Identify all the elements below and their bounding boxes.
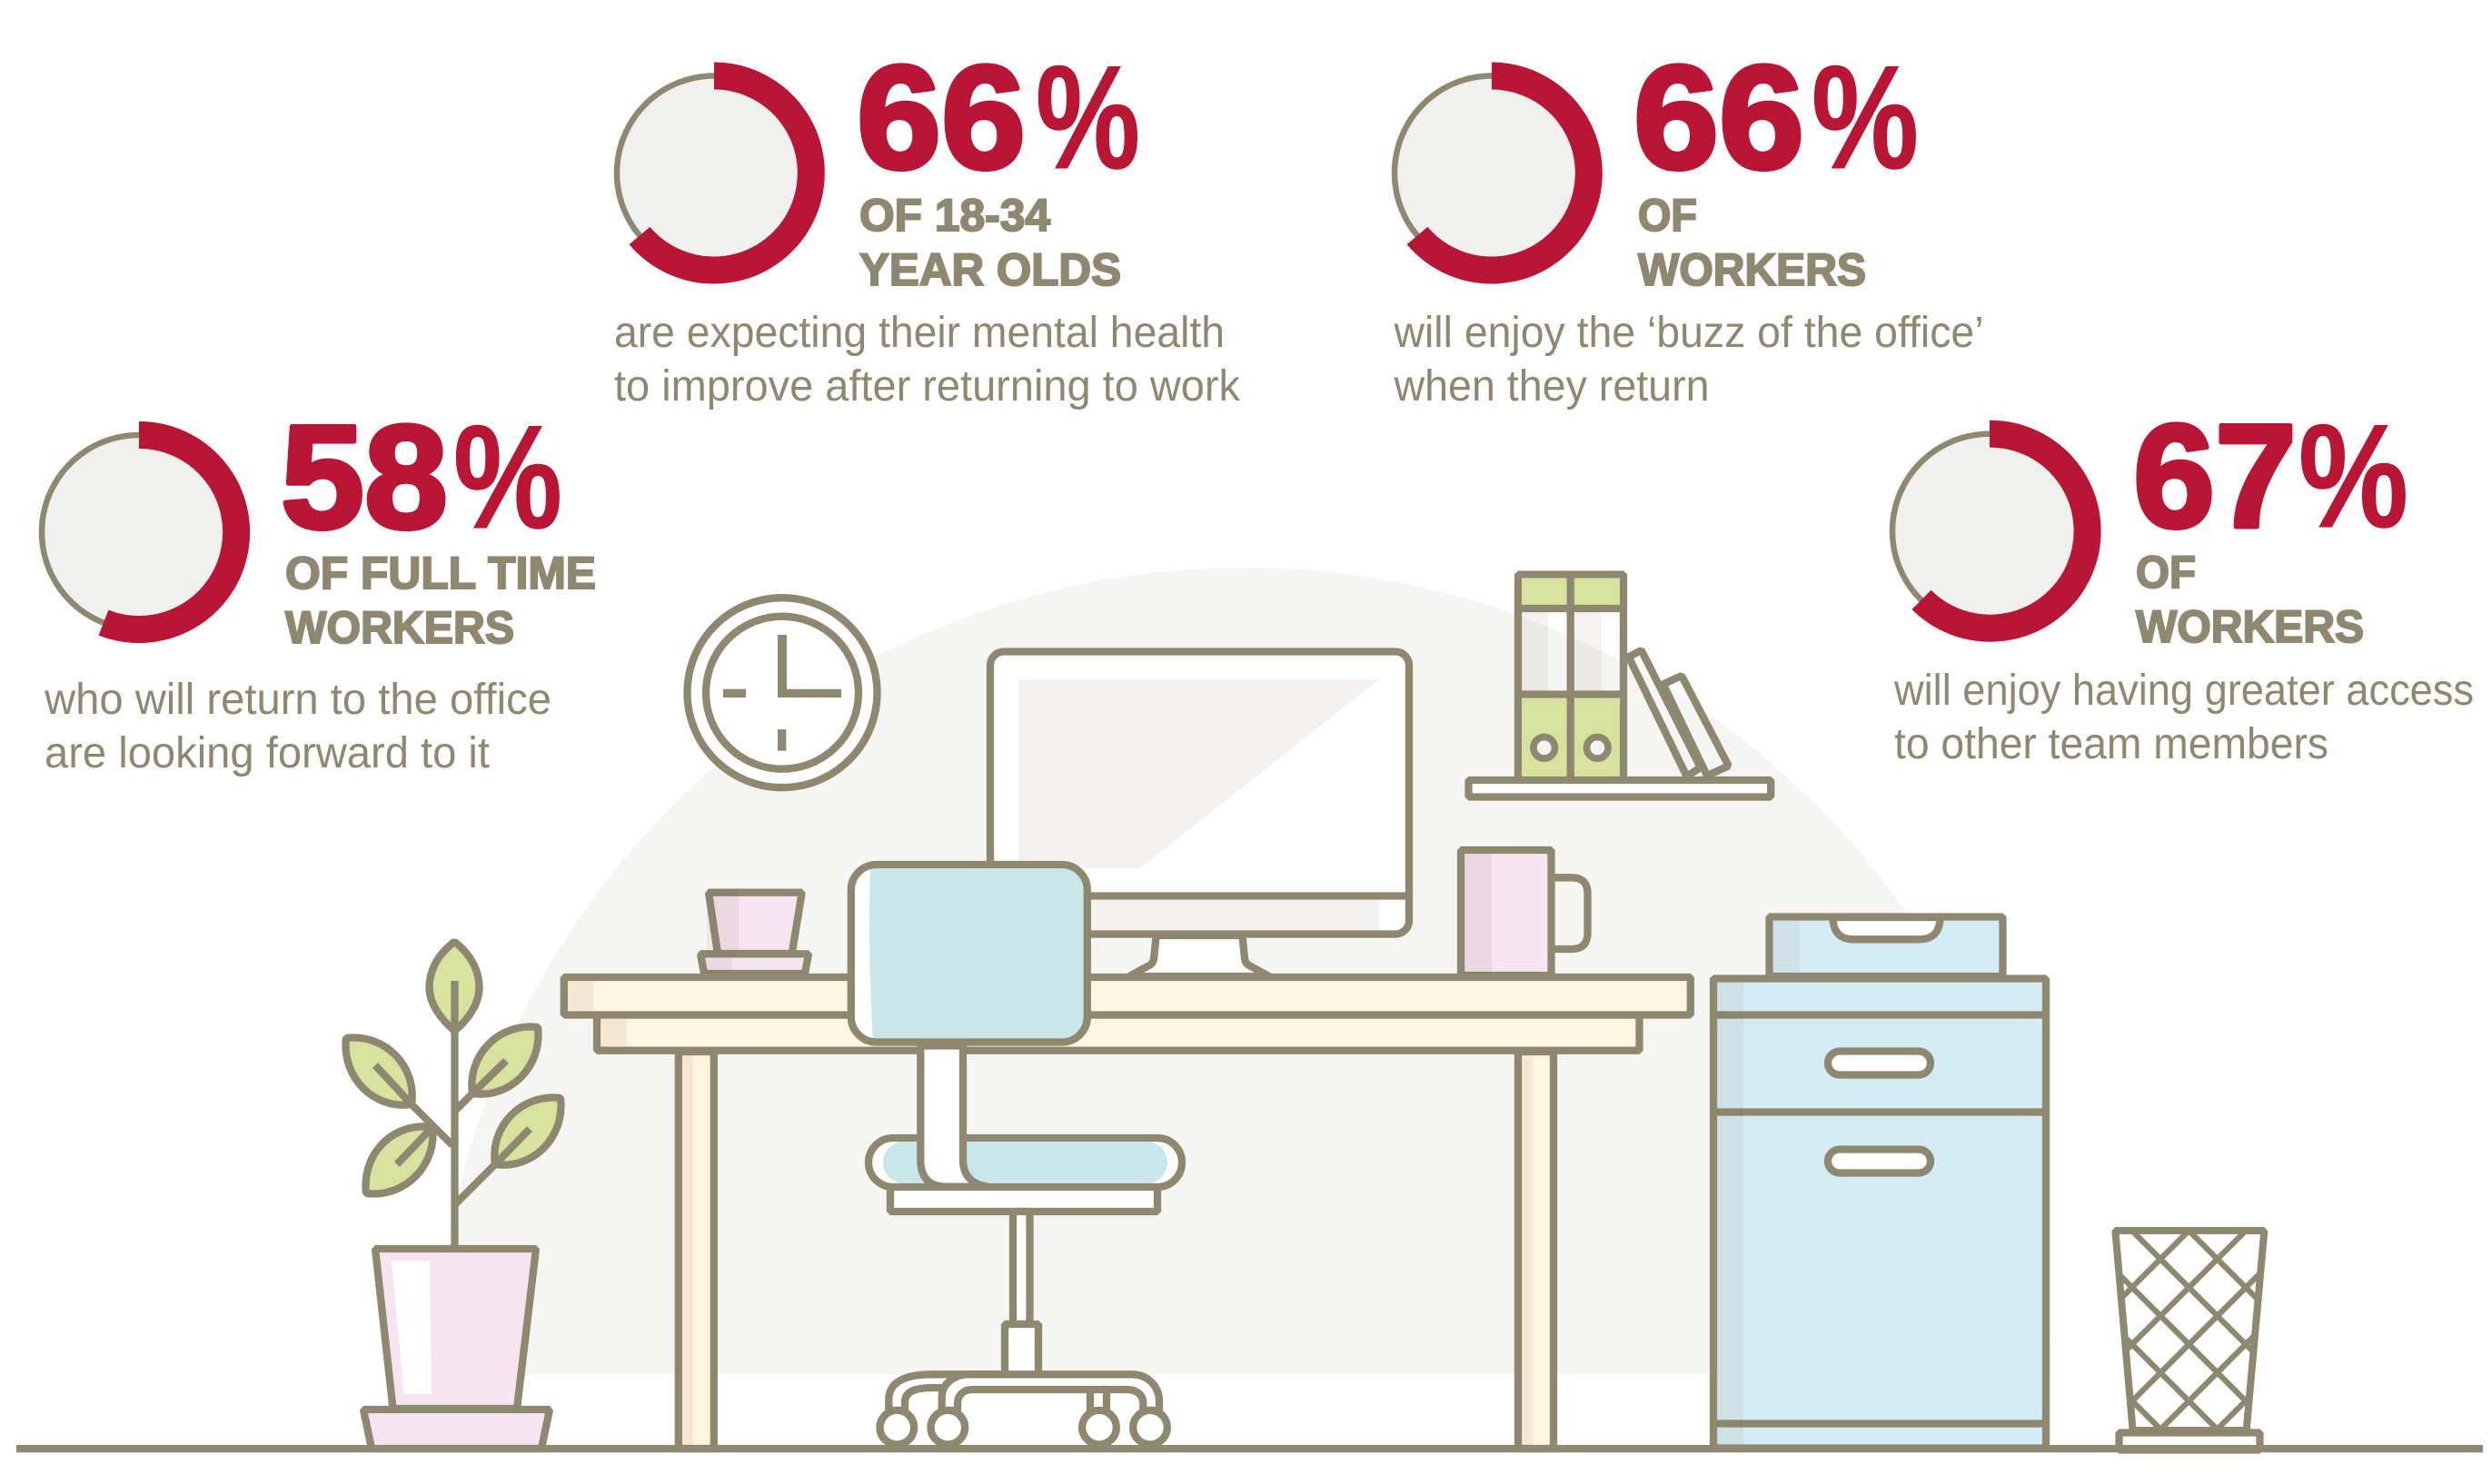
icon: waste basket [2111, 1227, 2268, 1454]
chair base and casters [879, 1374, 1167, 1444]
icon: computer monitor [990, 652, 1409, 976]
chair post [1005, 1212, 1038, 1375]
subheading: WORKERS [285, 602, 514, 653]
description [44, 676, 551, 777]
percentage: % [453, 395, 562, 559]
stat panel: 66% of 18-34 year olds [614, 35, 1241, 411]
cabinet body [1713, 979, 2046, 1448]
icon: desk [564, 977, 1691, 1449]
percentage [2133, 394, 2408, 559]
description: will enjoy the ‘buzz of the office’ [1394, 309, 1984, 357]
drawer handles [1828, 1052, 1931, 1173]
percentage [281, 395, 562, 559]
icon: filing cabinet [1713, 917, 2046, 1448]
description: to improve after returning to work [614, 362, 1241, 411]
binders [1518, 574, 1623, 778]
donut chart 66% [617, 76, 811, 271]
floor line [16, 1445, 2483, 1452]
desk legs [679, 1052, 1554, 1449]
paper tray [1770, 917, 2002, 976]
chair seat [869, 1046, 1182, 1212]
description: will enjoy having greater access [1893, 667, 2474, 715]
icon: shelf with binders and books [1468, 574, 1771, 797]
icon: plant pot on desk [700, 889, 809, 974]
stat panel: 58% of full time workers [42, 395, 596, 777]
subheading: WORKERS [1638, 244, 1866, 295]
stat panel: 67% of workers [1892, 394, 2474, 768]
subheading: YEAR OLDS [859, 244, 1121, 295]
subheading [859, 190, 1121, 295]
subheading: OF FULL TIME [285, 548, 596, 599]
description: are expecting their mental health [614, 309, 1225, 357]
description [614, 309, 1241, 411]
donut chart 66% [1395, 76, 1589, 271]
percentage [1633, 35, 1919, 200]
shelf [1468, 780, 1771, 797]
subheading [2136, 547, 2364, 652]
plant pot [363, 1249, 550, 1449]
stem and branches [412, 981, 495, 1246]
description [1893, 667, 2474, 768]
percentage: % [1812, 35, 1919, 200]
percentage: 66 [857, 35, 1026, 200]
donut chart 58% [42, 435, 236, 629]
percentage: % [2298, 394, 2408, 559]
background dome [438, 568, 2051, 1374]
percentage [857, 35, 1140, 200]
icon: wall clock [687, 598, 878, 787]
subheading: WORKERS [2136, 601, 2364, 652]
desk top [564, 977, 1691, 1051]
percentage: 58 [281, 395, 448, 559]
subheading: OF [1638, 190, 1697, 241]
description: when they return [1394, 362, 1710, 411]
icon: office chair [851, 865, 1182, 1444]
subheading [1638, 190, 1866, 295]
percentage: % [1036, 35, 1140, 200]
leaning books [1629, 650, 1729, 777]
description: to other team members [1894, 720, 2328, 768]
percentage: 66 [1633, 35, 1804, 200]
chair back [851, 865, 1088, 1043]
subheading: OF 18-34 [859, 190, 1050, 241]
icon: mug [1461, 850, 1588, 975]
leaves [346, 942, 561, 1193]
stat panel: 66% of workers [1394, 35, 1984, 411]
description: are looking forward to it [45, 729, 490, 777]
subheading: OF [2136, 547, 2196, 598]
subheading [285, 548, 596, 653]
donut chart 67% [1892, 434, 2088, 628]
description [1394, 309, 1984, 411]
percentage: 67 [2133, 394, 2297, 559]
description: who will return to the office [44, 676, 551, 724]
icon: potted plant [346, 942, 561, 1449]
